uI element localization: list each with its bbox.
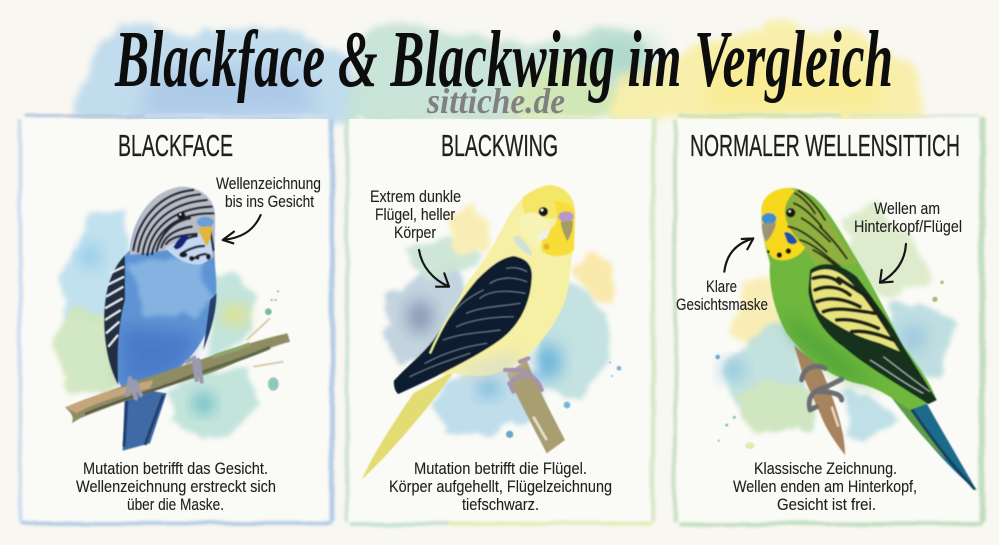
panel: Normaler Wellensittich frame [675, 116, 982, 524]
head with wavy face stripes [130, 187, 215, 264]
blue cheek patch [173, 234, 189, 249]
callout: Extrem dunkle Flügel: Flügel, heller [375, 205, 455, 224]
caption: Normaler Wellensittich: Gesicht ist frei. [777, 495, 876, 514]
caption: Blackface: Mutation betrifft das Gesicht. [83, 459, 268, 478]
caption: Normaler Wellensittich: Klassische Zeichnung. [754, 459, 897, 478]
feet [127, 358, 202, 398]
heading: Blackface: BLACKFACE [118, 128, 233, 163]
cere [197, 217, 214, 227]
callout: Wellenzeichnung bis ins Gesicht: Wellenzeichnung [216, 174, 321, 193]
feet [505, 358, 542, 392]
throat spots [786, 248, 791, 254]
body [423, 185, 575, 377]
perch [507, 360, 565, 453]
caption: Blackwing: tiefschwarz. [462, 495, 539, 514]
title watercolor wash [75, 20, 925, 122]
eye [177, 212, 185, 220]
watercolor splash [387, 203, 621, 438]
callout: Klare Gesichtsmaske: Klare [706, 277, 737, 296]
tail [362, 370, 455, 479]
wing with scallops [808, 264, 937, 404]
caption: Normaler Wellensittich: Wellen enden am Hinterkopf, [733, 477, 917, 496]
body [761, 188, 937, 410]
watermark: sittiche.de [426, 81, 565, 121]
eye [786, 208, 795, 217]
callout: Wellenzeichnung bis ins Gesicht: bis ins Gesicht [225, 192, 314, 211]
callout: Extrem dunkle Flügel: Körper [394, 223, 436, 242]
beak [762, 223, 776, 242]
throat spots [179, 252, 187, 257]
cere [558, 211, 574, 222]
caption: Blackface [76, 459, 276, 514]
beak [198, 226, 212, 246]
feet [802, 366, 842, 410]
caption: Blackface: Wellenzeichnung erstreckt sich [76, 477, 276, 496]
arrow: Wellenzeichnung [223, 215, 261, 243]
watercolor splash [715, 207, 955, 449]
callout: Klare Gesichtsmaske: Gesichtsmaske [676, 295, 768, 314]
body [105, 187, 216, 390]
panel: Blackface frame [20, 116, 332, 523]
callout: Extrem dunkle Flügel: Extrem dunkle [370, 187, 461, 206]
caption: Blackwing: Körper aufgehellt, Flügelzeichnung [389, 477, 612, 496]
callout: Wellen am Hinterkopf/Flügel: Hinterkopf/Flügel [854, 217, 962, 236]
caption: Blackwing: Mutation betrifft die Flügel. [414, 459, 587, 478]
arrow: Klare Gesichtsmaske [724, 238, 753, 272]
eye [539, 207, 548, 216]
watercolor splash [53, 210, 279, 440]
arrow: Extrem dunkle Flügel [419, 250, 449, 287]
caption: Blackface: über die Maske. [127, 495, 224, 514]
head waves on olive nape [785, 188, 857, 267]
caption: Normaler Wellensittich [733, 459, 917, 514]
blue cheek patch [784, 232, 797, 244]
illustration: blue Blackface budgerigar [53, 187, 290, 451]
yellow mask [761, 188, 805, 260]
callout: Extrem dunkle Flügel [370, 187, 461, 242]
heading: Blackwing: BLACKWING [441, 128, 558, 163]
beak [561, 221, 573, 241]
yellow head and mask [522, 185, 575, 220]
callout: Wellen am Hinterkopf/Flügel [854, 199, 962, 236]
perch [794, 345, 845, 455]
tail [123, 387, 167, 451]
branch [65, 318, 290, 423]
cere [762, 213, 776, 224]
caption: Blackwing [389, 459, 612, 514]
arrow: Wellen am Hinterkopf [880, 244, 906, 283]
black wing [394, 256, 532, 394]
callout: Wellen am Hinterkopf/Flügel: Wellen am [874, 199, 940, 218]
illustration: yellow Blackwing budgerigar [362, 185, 621, 479]
tail [887, 387, 977, 491]
panel: Blackwing frame [347, 116, 653, 524]
callout: Klare Gesichtsmaske [676, 277, 768, 314]
illustration: green normal budgerigar [715, 188, 977, 491]
callout: Wellenzeichnung bis ins Gesicht [216, 174, 321, 211]
wing with black and white bars [104, 255, 217, 385]
